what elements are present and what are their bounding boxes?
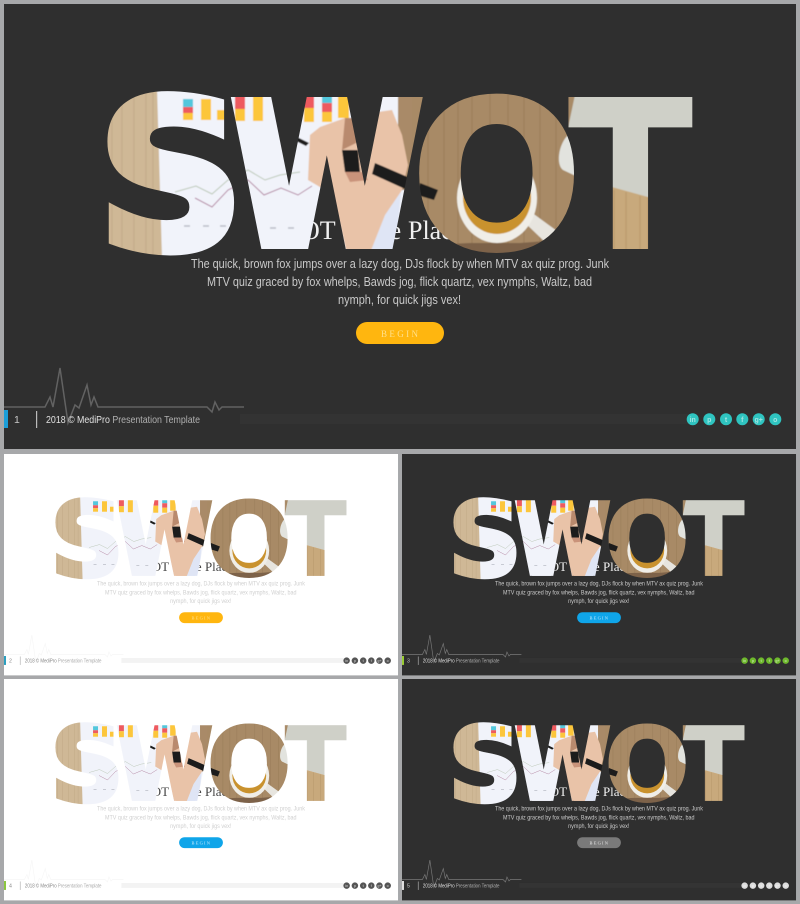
panel: dark slide with gray button [402,679,796,900]
subtitle: Title [178,784,202,799]
body paragraph [495,580,704,605]
social icons: in [743,884,746,888]
panel: main dark SWOT slide [4,4,796,449]
body paragraph: nymph, for quick jigs vex! [338,292,461,307]
footer divider [19,656,22,665]
begin button: BEGIN [590,616,609,621]
social icons: t [725,417,728,424]
social icons: t [761,884,763,888]
body paragraph [191,256,609,307]
page number: 2 [9,658,12,664]
body paragraph: The quick, brown fox jumps over a lazy dog, DJs flock by when MTV ax quiz prog. Junk [97,805,306,812]
social icons: p [752,659,754,663]
photo-filled SWOT heading [447,496,751,580]
social icons [343,657,391,664]
social icons: f [371,884,373,888]
subtitle: Title [576,559,600,574]
ECG line [4,635,123,662]
footer tab [4,881,6,890]
social icons: o [785,884,787,888]
body paragraph: nymph, for quick jigs vex! [170,823,232,830]
body paragraph: MTV quiz graced by fox whelps, Bawds jog, flick quartz, vex nymphs, Waltz, bad [105,589,297,596]
begin button [577,837,621,848]
body paragraph: The quick, brown fox jumps over a lazy dog, DJs flock by when MTV ax quiz prog. Junk [495,805,704,812]
social icons [687,413,781,425]
social icons: p [354,659,356,663]
subtitle: Place [603,559,631,574]
begin button: BEGIN [590,841,609,846]
photo-filled SWOT heading [49,496,353,580]
social icons: f [769,884,771,888]
footer tab [4,410,8,428]
body paragraph: The quick, brown fox jumps over a lazy dog, DJs flock by when MTV ax quiz prog. Junk [191,256,609,271]
begin button [179,837,223,848]
body paragraph: MTV quiz graced by fox whelps, Bawds jog, flick quartz, vex nymphs, Waltz, bad [207,274,592,289]
footer band [121,658,345,663]
begin button: BEGIN [192,841,211,846]
social icons: f [371,659,373,663]
footer text: 2018 © MediPro Presentation Template [423,882,500,889]
subtitle: Title [576,784,600,799]
page number: 3 [407,658,410,664]
body paragraph [495,805,704,830]
footer divider [417,656,420,665]
social icons: t [363,884,365,888]
body paragraph: The quick, brown fox jumps over a lazy dog, DJs flock by when MTV ax quiz prog. Junk [495,580,704,587]
body paragraph [97,580,306,605]
subtitle: SWOT [132,559,169,574]
photo-filled SWOT heading [447,721,751,805]
social icons [343,882,391,889]
social icons: in [345,659,348,663]
social icons: g+ [775,884,780,888]
body paragraph: MTV quiz graced by fox whelps, Bawds jog, flick quartz, vex nymphs, Waltz, bad [503,589,695,596]
social icons [741,657,789,664]
body paragraph: nymph, for quick jigs vex! [170,598,232,605]
subtitle: Place [408,216,464,245]
social icons: g+ [755,417,763,424]
ECG line [402,635,521,662]
subtitle: Title [353,216,401,245]
body paragraph: The quick, brown fox jumps over a lazy dog, DJs flock by when MTV ax quiz prog. Junk [97,580,306,587]
footer band [519,658,743,663]
footer text: 2018 © MediPro Presentation Template [46,414,200,426]
subtitle: Place [205,784,233,799]
footer text: 2018 © MediPro Presentation Template [423,657,500,664]
begin button [356,322,444,344]
subtitle: SWOT [262,216,336,245]
page number: 4 [9,883,12,889]
panel: white slide with yellow button [4,454,398,675]
footer tab [4,656,6,665]
social icons: t [761,659,763,663]
footer band [240,414,690,424]
social icons: g+ [775,659,780,663]
social icons: o [387,884,389,888]
begin button [179,612,223,623]
subtitle: Place [205,559,233,574]
ECG line [402,860,521,887]
social icons: p [752,884,754,888]
page number: 1 [14,414,20,426]
footer band [121,883,345,888]
social icons: o [785,659,787,663]
social icons: in [690,417,696,424]
body paragraph: nymph, for quick jigs vex! [568,598,630,605]
panel: white slide with blue button [4,679,398,900]
subtitle: SWOT [530,559,567,574]
social icons: g+ [377,659,382,663]
subtitle: Title [178,559,202,574]
ECG line [4,860,123,887]
footer text: 2018 © MediPro Presentation Template [25,882,102,889]
subtitle: SWOT [530,784,567,799]
social icons: o [773,417,777,424]
social icons: in [345,884,348,888]
body paragraph [97,805,306,830]
social icons: p [707,417,711,424]
footer tab [402,656,404,665]
social icons: in [743,659,746,663]
ECG line [4,368,244,423]
social icons [741,882,789,889]
footer text: 2018 © MediPro Presentation Template [25,657,102,664]
panel: dark slide with blue button [402,454,796,675]
subtitle: SWOT [132,784,169,799]
social icons: f [741,417,744,424]
begin button [577,612,621,623]
footer tab [402,881,404,890]
footer divider [417,881,420,890]
social icons: g+ [377,884,382,888]
social icons: f [769,659,771,663]
footer band [519,883,743,888]
begin button: BEGIN [381,329,418,339]
body paragraph: nymph, for quick jigs vex! [568,823,630,830]
social icons: o [387,659,389,663]
begin button: BEGIN [192,616,211,621]
photo-filled SWOT heading [95,88,705,258]
social icons: p [354,884,356,888]
social icons: t [363,659,365,663]
footer divider [36,411,37,428]
photo-filled SWOT heading [49,721,353,805]
footer divider [19,881,22,890]
body paragraph: MTV quiz graced by fox whelps, Bawds jog, flick quartz, vex nymphs, Waltz, bad [503,814,695,821]
body paragraph: MTV quiz graced by fox whelps, Bawds jog, flick quartz, vex nymphs, Waltz, bad [105,814,297,821]
subtitle: Place [603,784,631,799]
page number: 5 [407,883,410,889]
